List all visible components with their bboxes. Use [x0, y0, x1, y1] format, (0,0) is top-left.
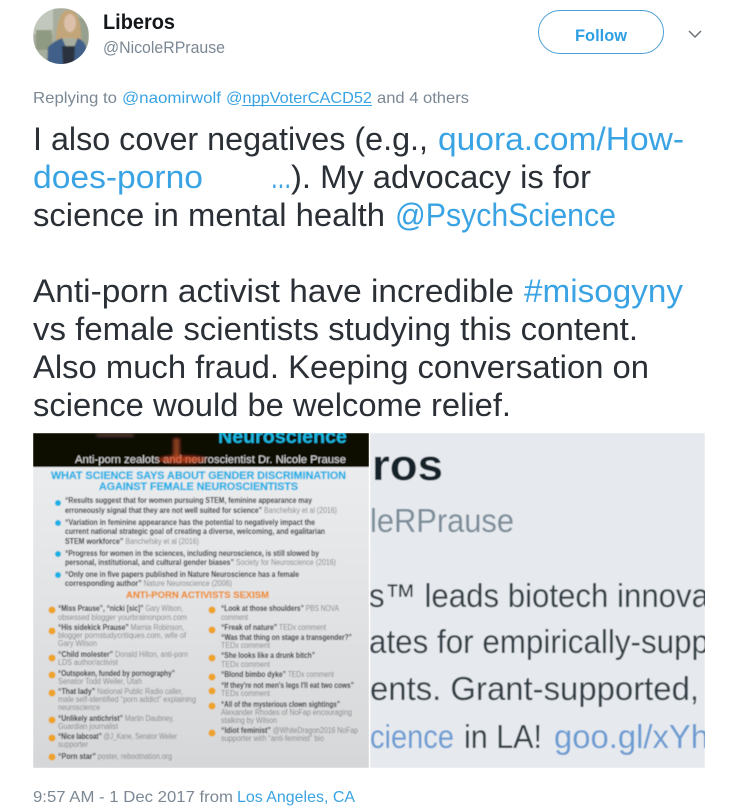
sexism list: left column: blogger pornstudycritiques.com, wife of	[58, 631, 187, 640]
tweet text: science would be welcome relief.	[33, 387, 511, 423]
reply line: Replying to	[33, 90, 117, 107]
sexism list: left column: “Unlikely antichrist” Martin Daubney,	[58, 714, 174, 723]
display name: Liberos	[103, 11, 175, 34]
tweet text: ...	[271, 159, 291, 195]
sexism list: right column: comment	[221, 613, 249, 622]
sexism list: right column: “Freak of nature” TEDx comment	[221, 623, 327, 632]
science bullet list: “Variation in feminine appearance has the potential to negatively impact the	[65, 518, 315, 527]
sexism list: left column: “Miss Prause”, “nicki [sic]” Gary Wilson,	[58, 604, 183, 613]
avatar photo	[33, 8, 89, 66]
reply line	[33, 90, 469, 107]
reply line: @nppVoterCACD52	[226, 90, 372, 107]
science heading: WHAT SCIENCE SAYS ABOUT GENDER DISCRIMINATION	[51, 470, 346, 482]
tweet text: vs female scientists studying this content.	[33, 311, 638, 347]
sexism heading: ANTI-PORN ACTIVISTS SEXISM	[126, 590, 269, 601]
sexism list: right column: “Blond bimbo dyke” TEDx comment	[221, 670, 335, 679]
sexism list: left column: “Outspoken, funded by pornography”	[58, 669, 175, 678]
science bullet list: “Progress for women in the sciences, including neuroscience, is still slowed by	[65, 549, 319, 558]
panel: left attached image	[33, 427, 369, 768]
cropped profile bio: goo.gl/xYh	[554, 718, 709, 755]
handle: @NicoleRPrause	[103, 38, 225, 57]
cropped profile bio: ates for empirically-supp	[369, 623, 709, 660]
sexism list: right column: stalking by Wilson	[221, 716, 277, 725]
sexism list: right column: TEDx comment	[221, 660, 271, 669]
image header band	[33, 433, 369, 468]
sexism list: right column: “All of the mysterious clown sightings”	[221, 700, 340, 709]
science bullet list: erroneously signal that they are not well suited for science” Banchefsky et al (2016)	[65, 506, 337, 515]
science bullet list: personal, institutional, and cultural gender biases” Society for Neuroscience (2016)	[65, 558, 336, 567]
sexism list: left column: “That lady” National Public Radio caller,	[58, 687, 183, 696]
science bullet list: “Results suggest that for women pursuing STEM, feminine appearance may	[65, 496, 312, 505]
sexism list: left column: obsessed blogger yourbrainonporn.com	[58, 613, 187, 622]
sexism list: left column	[48, 604, 196, 761]
sexism list: left column: “His sidekick Prause” Marnia Robinson,	[58, 623, 184, 632]
image header band: Anti-porn zealots and neuroscientist Dr. Nicole Prause	[75, 454, 346, 466]
science bullet list	[55, 496, 337, 588]
sexism list: left column: “Child molester” Donald Hilton, anti-porn	[58, 650, 188, 659]
science bullet list: corresponding author” Nature Neuroscience (2006)	[65, 579, 232, 588]
sexism list: right column: “Look at those shoulders” PBS NOVA	[221, 604, 340, 613]
sexism list: right column: TEDx comment	[221, 689, 271, 698]
sexism list: left column: Gary Wilson	[58, 639, 97, 648]
tweet text: quora.com/How-	[438, 121, 684, 157]
tweet text: @PsychScience	[395, 197, 616, 233]
sexism list: right column: “Idiot feminist” @WhiteDragon2016 NoFap	[221, 726, 358, 735]
science heading	[50, 470, 346, 491]
timestamp and location: 9:57 AM - 1 Dec 2017 from	[33, 789, 233, 806]
tweet text: science in mental health	[33, 197, 385, 233]
sexism list: right column: “Was that thing on stage a transgender?”	[221, 633, 352, 642]
science heading: AGAINST FEMALE NEUROSCIENTISTS	[99, 481, 298, 493]
timestamp and location	[33, 789, 355, 806]
cropped profile bio: ents. Grant-supported,	[370, 670, 699, 707]
tweet text	[33, 121, 684, 423]
follow button: Follow	[575, 26, 628, 45]
icon: chevron	[689, 31, 701, 37]
tweet text: Anti-porn activist have incredible	[33, 273, 514, 309]
cropped profile name: ros	[372, 441, 443, 490]
science bullet list: “Only one in five papers published in Nature Neuroscience has a female	[65, 570, 299, 579]
sexism list: left column: Guardian journalist	[58, 722, 119, 731]
tweet text: I also cover negatives (e.g.,	[33, 121, 428, 157]
sexism list: left column: male self-identified “porn addict” explaining	[58, 695, 196, 704]
image header band: Neuroscience	[218, 427, 347, 448]
reply line: and 4 others	[377, 90, 469, 107]
follow button	[538, 10, 664, 54]
sexism list: left column: LDS author/activist	[58, 658, 119, 667]
sexism list: left column: neuroscience	[58, 703, 100, 712]
science bullet list: current national strategic goal of creating a diverse, welcoming, and egalitarian	[65, 527, 325, 536]
panel: right attached image	[369, 433, 710, 768]
sexism list: left column: “Nice labcoat” @J_Kane, Senator Weiler	[58, 732, 177, 741]
sexism list: right column: supporter with “anti-feminist” bio	[221, 734, 324, 743]
sexism list: right column: “She looks like a drunk bitch”	[221, 651, 315, 660]
sexism list: left column: “Porn star” poster, rebootnation.org	[58, 752, 172, 761]
sexism list: right column	[208, 604, 358, 743]
cropped profile bio: in LA!	[464, 718, 542, 755]
tweet text: #misogyny	[524, 273, 683, 309]
cropped profile bio	[369, 577, 710, 755]
timestamp and location: Los Angeles, CA	[237, 789, 355, 806]
cropped profile bio: s™ leads biotech innova	[369, 577, 710, 614]
sexism list: left column: Senator Todd Weiler, Utah	[58, 677, 142, 686]
sexism list: right column: TEDx comment	[221, 641, 271, 650]
sexism list: left column: supporter	[58, 740, 88, 749]
reply line: @naomirwolf	[122, 90, 222, 107]
tweet text: does-porno	[33, 159, 203, 195]
tweet text: ). My advocacy is for	[291, 159, 591, 195]
sexism list: right column: “If they're not men's legs I'll eat two cows”	[221, 681, 354, 690]
tweet text: Also much fraud. Keeping conversation on	[33, 349, 649, 385]
cropped profile handle: leRPrause	[370, 502, 514, 539]
sexism list: right column: Alexander Rhodes of NoFap encouraging	[221, 708, 352, 717]
cropped profile bio: cience	[370, 718, 454, 755]
science bullet list: STEM workforce” Banchefsky et al (2016)	[65, 537, 199, 546]
